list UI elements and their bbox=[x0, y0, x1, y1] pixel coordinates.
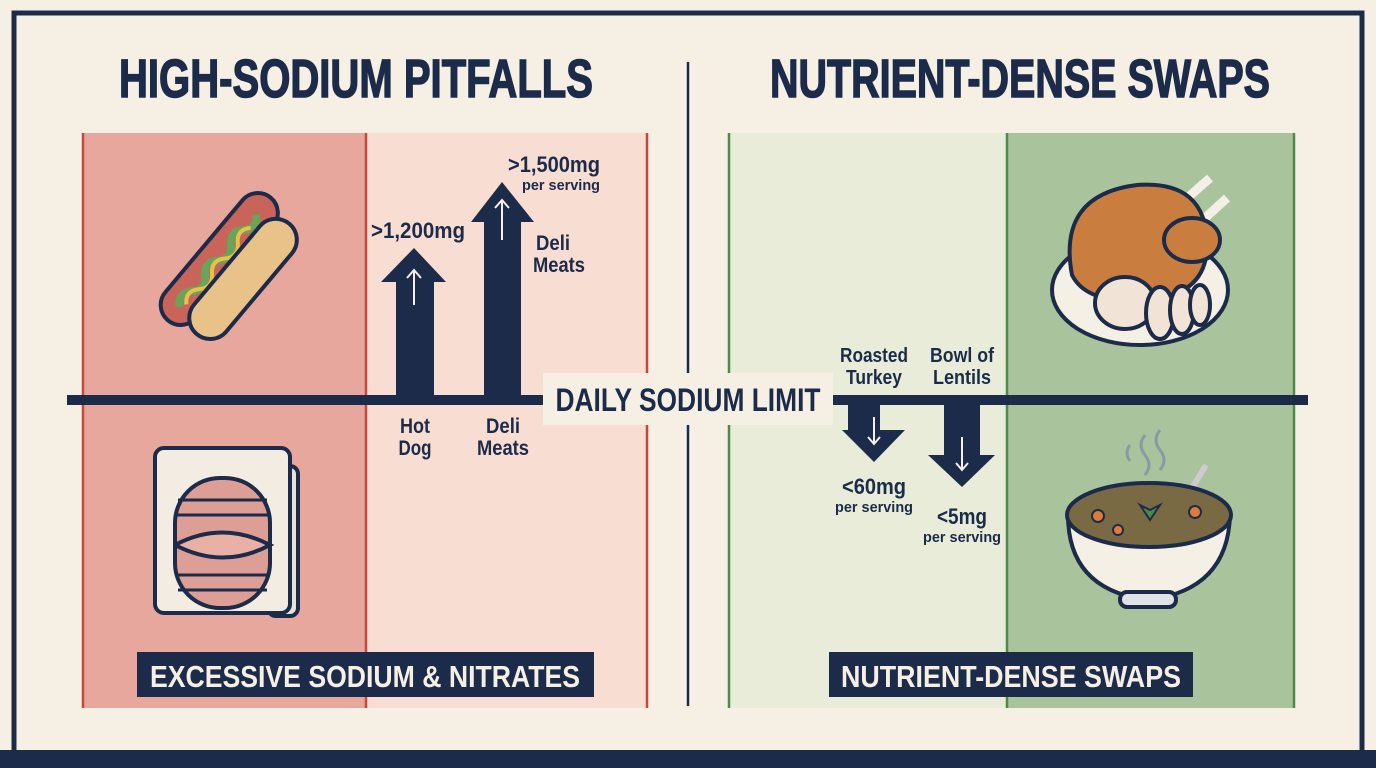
badge: excessive sodium & nitrates bbox=[137, 652, 594, 697]
daily sodium limit line bbox=[67, 395, 1308, 405]
icon: lentil bowl bbox=[1067, 430, 1231, 607]
label: bowl of lentils bbox=[930, 345, 994, 389]
label: daily sodium limit bbox=[543, 373, 833, 425]
label: >1,500mg per serving: per serving bbox=[522, 177, 600, 194]
panel: swaps bbox=[728, 133, 1295, 708]
label: roasted turkey: Roasted bbox=[840, 345, 908, 367]
label: roasted turkey bbox=[840, 345, 908, 389]
label: >1,500mg per serving bbox=[508, 152, 600, 194]
badge: excessive sodium & nitrates: EXCESSIVE SODIUM & NITRATES bbox=[150, 659, 580, 694]
title: high-sodium pitfalls: HIGH-SODIUM PITFALLS bbox=[119, 49, 593, 109]
center divider bbox=[687, 62, 689, 706]
badge: nutrient-dense swaps bbox=[829, 652, 1193, 697]
icon: deli meat pack bbox=[155, 448, 298, 616]
label: bowl of lentils: Bowl of bbox=[930, 345, 994, 367]
panel: high-sodium bbox=[82, 133, 648, 708]
label: hot dog: Dog bbox=[398, 437, 432, 460]
label: <5mg: <5mg bbox=[937, 504, 987, 529]
icon: hot dog bbox=[153, 185, 311, 354]
label: deli meats lower bbox=[477, 415, 529, 460]
label: deli meats upper: Deli bbox=[536, 232, 570, 255]
label: deli meats upper: Meats bbox=[533, 254, 585, 277]
label: <5mg bbox=[923, 504, 1001, 546]
label: >1,200mg: >1,200mg bbox=[371, 218, 465, 243]
label: hot dog: Hot bbox=[400, 415, 430, 438]
label: <60mg bbox=[835, 474, 913, 516]
label: <60mg: per serving bbox=[835, 499, 913, 516]
label: roasted turkey: Turkey bbox=[846, 367, 903, 389]
badge: nutrient-dense swaps: NUTRIENT-DENSE SWAPS bbox=[841, 659, 1181, 694]
icon: roasted turkey bbox=[1052, 178, 1228, 345]
label: daily sodium limit: DAILY SODIUM LIMIT bbox=[556, 382, 821, 418]
label: hot dog bbox=[398, 415, 432, 460]
label: <5mg: per serving bbox=[923, 529, 1001, 546]
label: deli meats upper bbox=[533, 232, 585, 277]
arrow: deli meats up bbox=[471, 182, 534, 400]
label: <60mg: <60mg bbox=[842, 474, 906, 499]
label: deli meats lower: Meats bbox=[477, 437, 529, 460]
label: >1,500mg per serving: >1,500mg bbox=[508, 152, 600, 177]
arrow: hot dog up bbox=[381, 248, 446, 400]
label: bowl of lentils: Lentils bbox=[933, 367, 991, 389]
arrow: turkey down bbox=[842, 400, 905, 462]
label: deli meats lower: Deli bbox=[486, 415, 520, 438]
arrow: lentils down bbox=[928, 400, 995, 487]
